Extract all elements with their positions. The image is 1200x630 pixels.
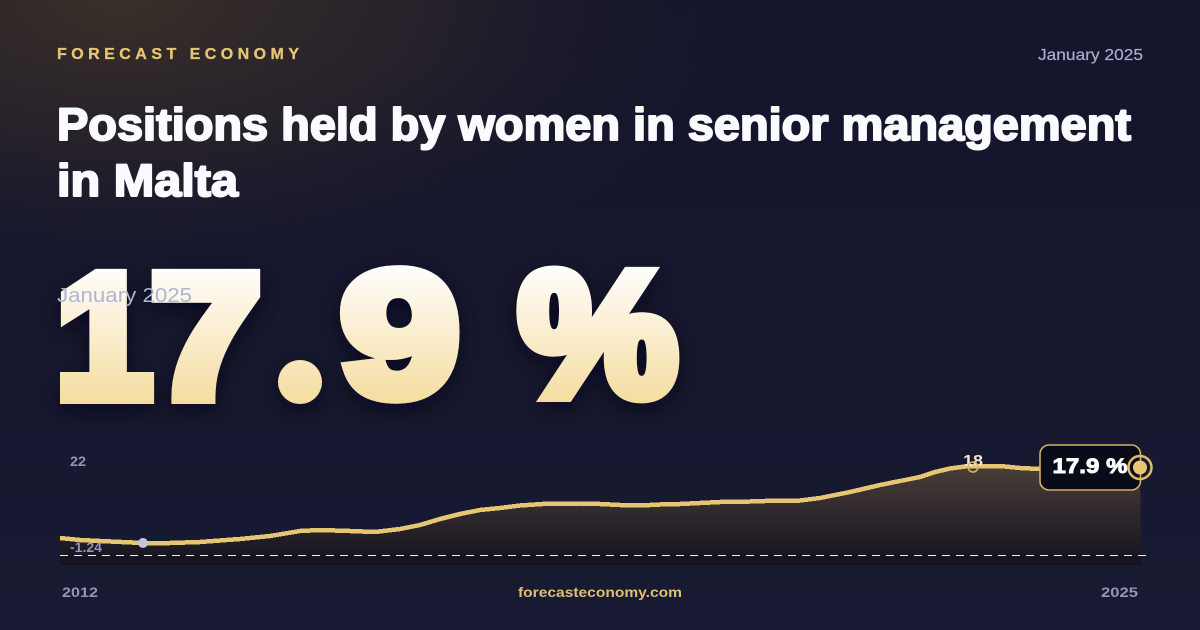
x axis end year: 2025 [1101,584,1138,600]
big value: 7 [151,239,261,435]
title [57,99,1131,206]
title: Positions held by women in senior management [57,99,1131,150]
big value: . [276,236,324,432]
area fill [60,466,1141,565]
callout [1040,445,1140,490]
date overlay on value: January 2025 [57,285,192,307]
minimum marker [138,538,148,548]
big value: % [519,237,677,433]
latest marker [1128,456,1152,479]
baseline [60,554,1146,556]
date top right: January 2025 [1038,47,1143,64]
axis min label: -1.24 [70,539,102,555]
line chart [60,445,1152,565]
peak marker [968,462,978,472]
big value: 9 [341,237,459,433]
axis max label: 22 [70,453,86,469]
callout: 17.9 % [1052,455,1128,478]
website: forecasteconomy.com [518,584,682,600]
trend line [60,466,1140,543]
title: in Malta [57,155,239,206]
brand label: FORECAST ECONOMY [57,46,299,63]
peak label: 18 [963,453,983,470]
big value: 1 [56,239,152,435]
big value [56,236,677,435]
x axis start year: 2012 [62,584,98,600]
